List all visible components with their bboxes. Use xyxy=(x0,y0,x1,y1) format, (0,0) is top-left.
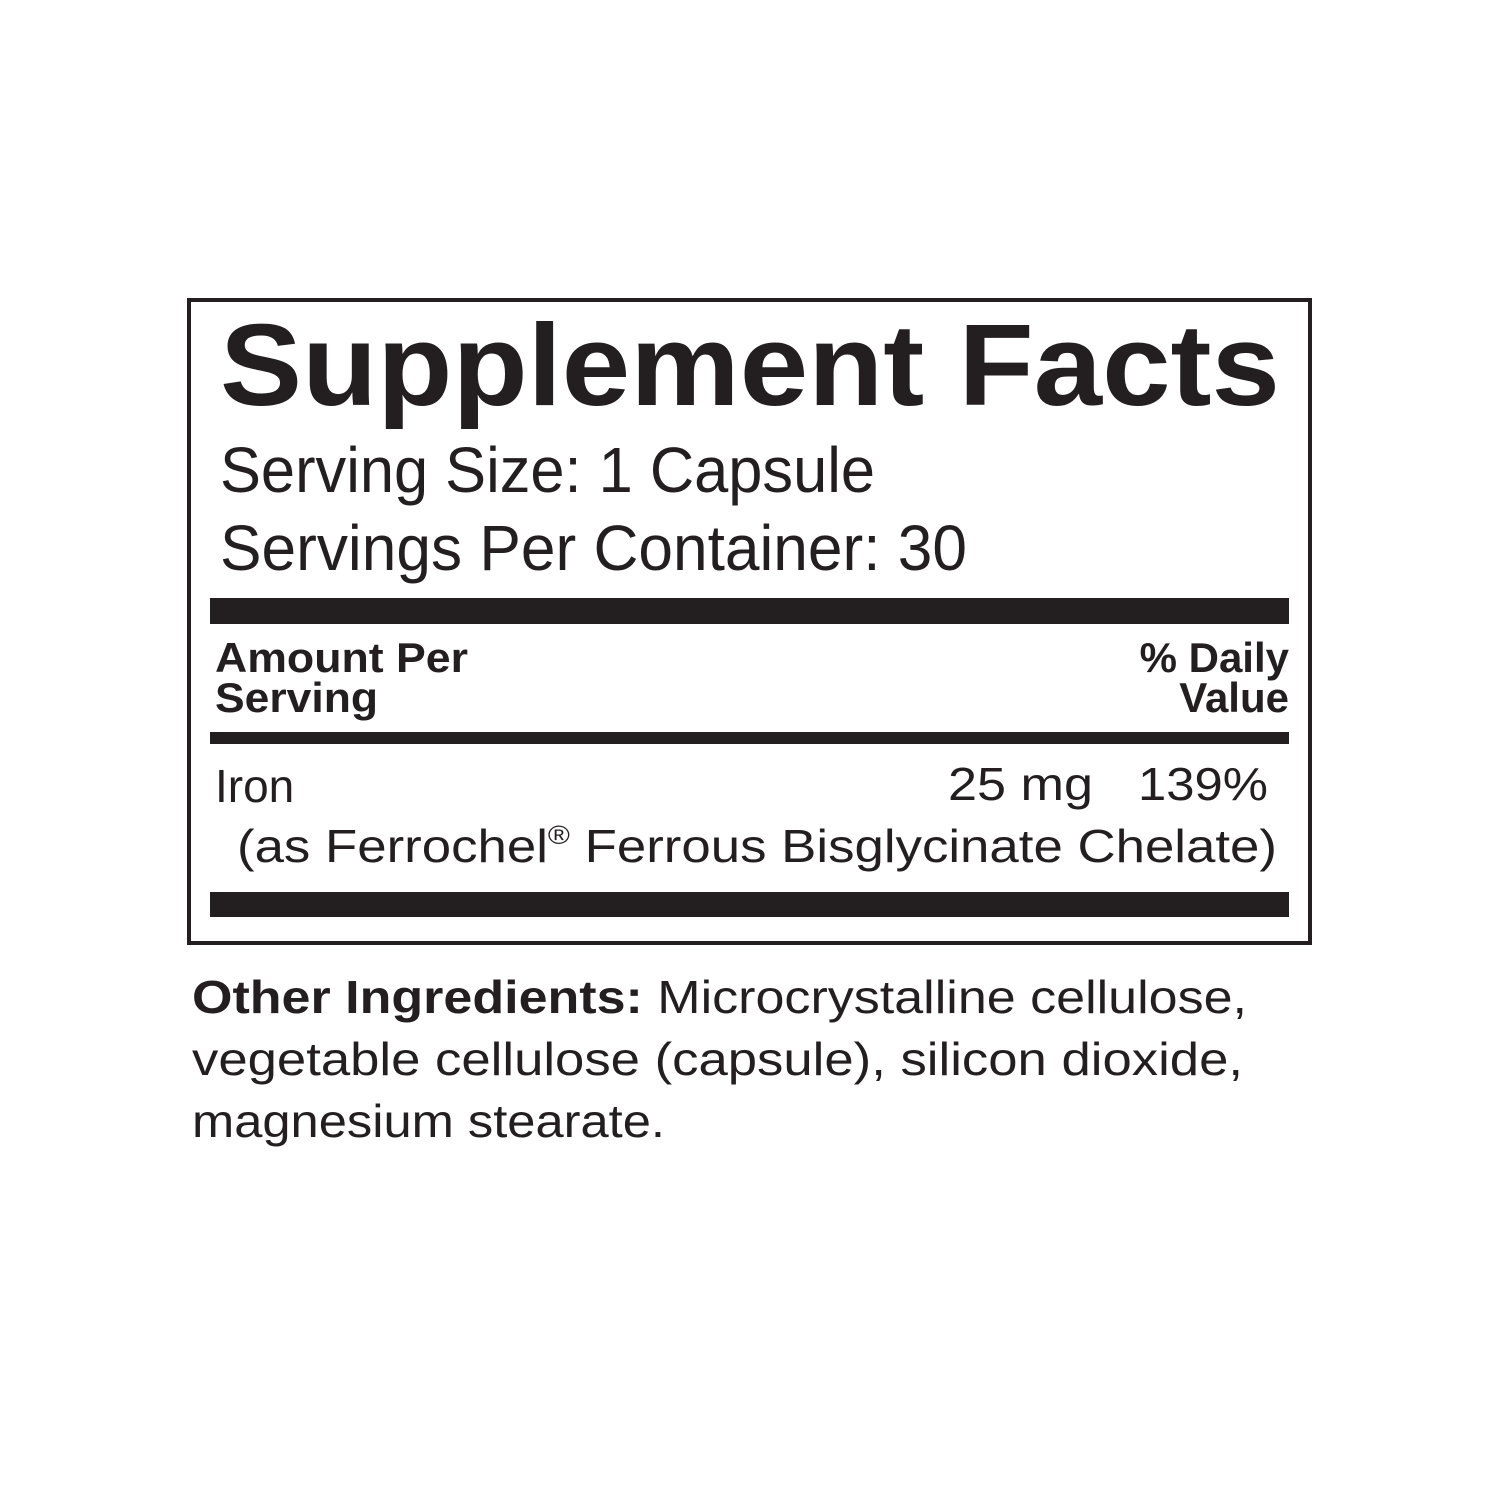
title: Supplement Facts xyxy=(220,300,1280,430)
header: amount per serving: Serving xyxy=(215,674,378,721)
header: % daily value: % Daily xyxy=(1140,634,1290,681)
row: iron xyxy=(215,758,1277,872)
servings per container: Servings Per Container: 30 xyxy=(220,512,967,584)
other ingredients text: Other Ingredients: Microcrystalline cellulose, xyxy=(192,971,1247,1023)
row: iron: 139% xyxy=(1138,758,1268,810)
row: iron: Iron xyxy=(215,760,294,812)
serving size: Serving Size: 1 Capsule xyxy=(220,434,875,506)
header: % daily value xyxy=(1140,634,1290,721)
header: amount per serving: Amount Per xyxy=(215,634,468,681)
panel: supplement facts box xyxy=(189,300,1310,943)
header: % daily value: Value xyxy=(1179,674,1289,721)
row: iron: ® xyxy=(548,820,570,850)
row: iron: 25 mg xyxy=(948,758,1093,810)
other ingredients text: vegetable cellulose (capsule), silicon dioxide, xyxy=(192,1033,1243,1085)
row: iron: (as Ferrochel xyxy=(237,820,508,872)
other ingredients text: magnesium stearate. xyxy=(192,1095,665,1147)
other ingredients text xyxy=(192,971,1247,1147)
header: amount per serving xyxy=(215,634,468,721)
row: iron: Ferrous Bisglycinate Chelate) xyxy=(570,820,1277,872)
